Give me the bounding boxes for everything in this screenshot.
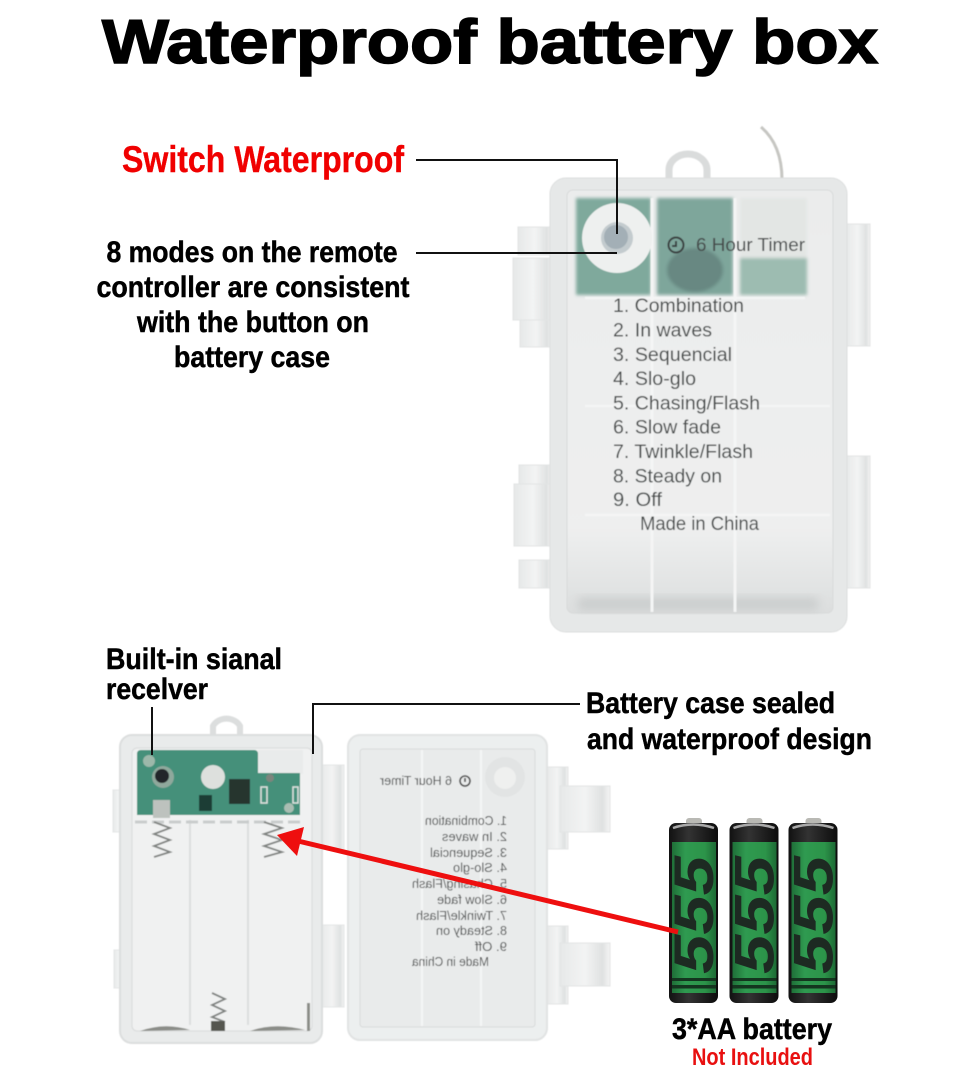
mode list xyxy=(613,295,760,535)
callout: modes and remote controller: with the button on xyxy=(136,306,369,339)
mode list: 5. Chasing/Flash xyxy=(613,392,760,414)
callout: built-in signal receiver: Built-in sianal xyxy=(106,643,282,676)
timer label: 6 Hour Timer xyxy=(696,234,805,255)
mirrored mode list: 4. Slo-glo xyxy=(453,860,507,875)
mirrored mode list: 6. Slow fade xyxy=(437,892,507,907)
photo: open case, lid inside xyxy=(348,735,610,1040)
photo: closed battery case xyxy=(513,127,870,632)
title: Waterproof battery box xyxy=(102,8,879,77)
mode list: 4. Slo-glo xyxy=(613,368,696,390)
mirrored timer label: 6 Hour Timer xyxy=(379,773,452,788)
button ring xyxy=(582,203,652,273)
callout: built-in signal receiver: recelver xyxy=(106,673,208,706)
hanger loop xyxy=(213,719,240,738)
side clips xyxy=(513,224,870,588)
callout: modes and remote controller: 8 modes on the remote xyxy=(106,236,398,269)
side clips xyxy=(113,765,344,1007)
circuit board xyxy=(137,750,300,815)
mode list: 3. Sequencial xyxy=(613,344,732,366)
mode list: 6. Slow fade xyxy=(613,416,721,438)
mirrored mode list: 9. Off xyxy=(475,939,507,954)
batteries xyxy=(662,818,844,1003)
interior xyxy=(132,748,312,1031)
callout: sealed and waterproof design: and waterproof design xyxy=(587,723,872,756)
lid shell xyxy=(348,735,547,1040)
shading at lower edge xyxy=(578,598,818,610)
compartment dividers xyxy=(585,198,830,612)
callout: modes and remote controller xyxy=(96,236,617,374)
button centre xyxy=(601,222,633,254)
inner panel xyxy=(567,190,833,613)
battery 3 xyxy=(782,818,844,1003)
callout: sealed and waterproof design xyxy=(313,687,872,756)
battery label: 3*AA battery xyxy=(672,1013,832,1046)
callout: switch waterproof: Switch Waterproof xyxy=(122,139,405,180)
board components xyxy=(143,755,298,818)
not included note: Not Included xyxy=(692,1044,813,1071)
mode list: 8. Steady on xyxy=(613,466,722,488)
contacts xyxy=(140,1003,310,1031)
mode list: 1. Combination xyxy=(613,295,744,317)
mirrored mode list: 2. In waves xyxy=(442,829,507,844)
timer icon xyxy=(668,238,684,252)
mirrored mode list: 1. Combination xyxy=(425,813,507,828)
hanger loop xyxy=(669,154,707,182)
battery 2 xyxy=(722,818,786,1003)
lid button ring xyxy=(485,757,525,797)
mirrored mode list: 7. Twinkle/Flash xyxy=(416,908,507,923)
lid clips xyxy=(546,767,610,1004)
green circuit board seen through case xyxy=(576,198,807,295)
callout: modes and remote controller: controller are consistent xyxy=(96,271,410,304)
callout: switch waterproof xyxy=(122,139,617,234)
wire xyxy=(761,127,782,180)
mode list: 9. Off xyxy=(613,489,663,511)
mode list: 7. Twinkle/Flash xyxy=(613,441,753,463)
callout: built-in signal receiver xyxy=(106,643,282,755)
arrow: batteries into compartment xyxy=(277,827,678,932)
springs xyxy=(154,822,282,1022)
mode list: Made in China xyxy=(640,513,759,535)
callout: sealed and waterproof design: Battery case sealed xyxy=(586,687,835,720)
mirrored mode list: Made in China xyxy=(411,954,489,969)
case outer shell xyxy=(550,178,847,632)
compartment dividers xyxy=(190,820,248,1025)
lid inner panel xyxy=(360,749,535,1027)
mirrored mode list: 3. Sequencial xyxy=(430,845,507,860)
shell xyxy=(120,735,322,1043)
empty corner above the board xyxy=(258,750,303,774)
mirrored mode list xyxy=(411,813,507,969)
battery 1 xyxy=(662,818,725,1003)
photo: open case, battery compartment xyxy=(113,719,344,1043)
mirrored mode list: 8. Steady on xyxy=(436,923,507,938)
callout: modes and remote controller: battery case xyxy=(174,341,330,374)
mode list: 2. In waves xyxy=(613,320,712,342)
timer icon xyxy=(460,776,470,786)
mirrored mode list: 5. Chasing/Flash xyxy=(412,876,507,891)
